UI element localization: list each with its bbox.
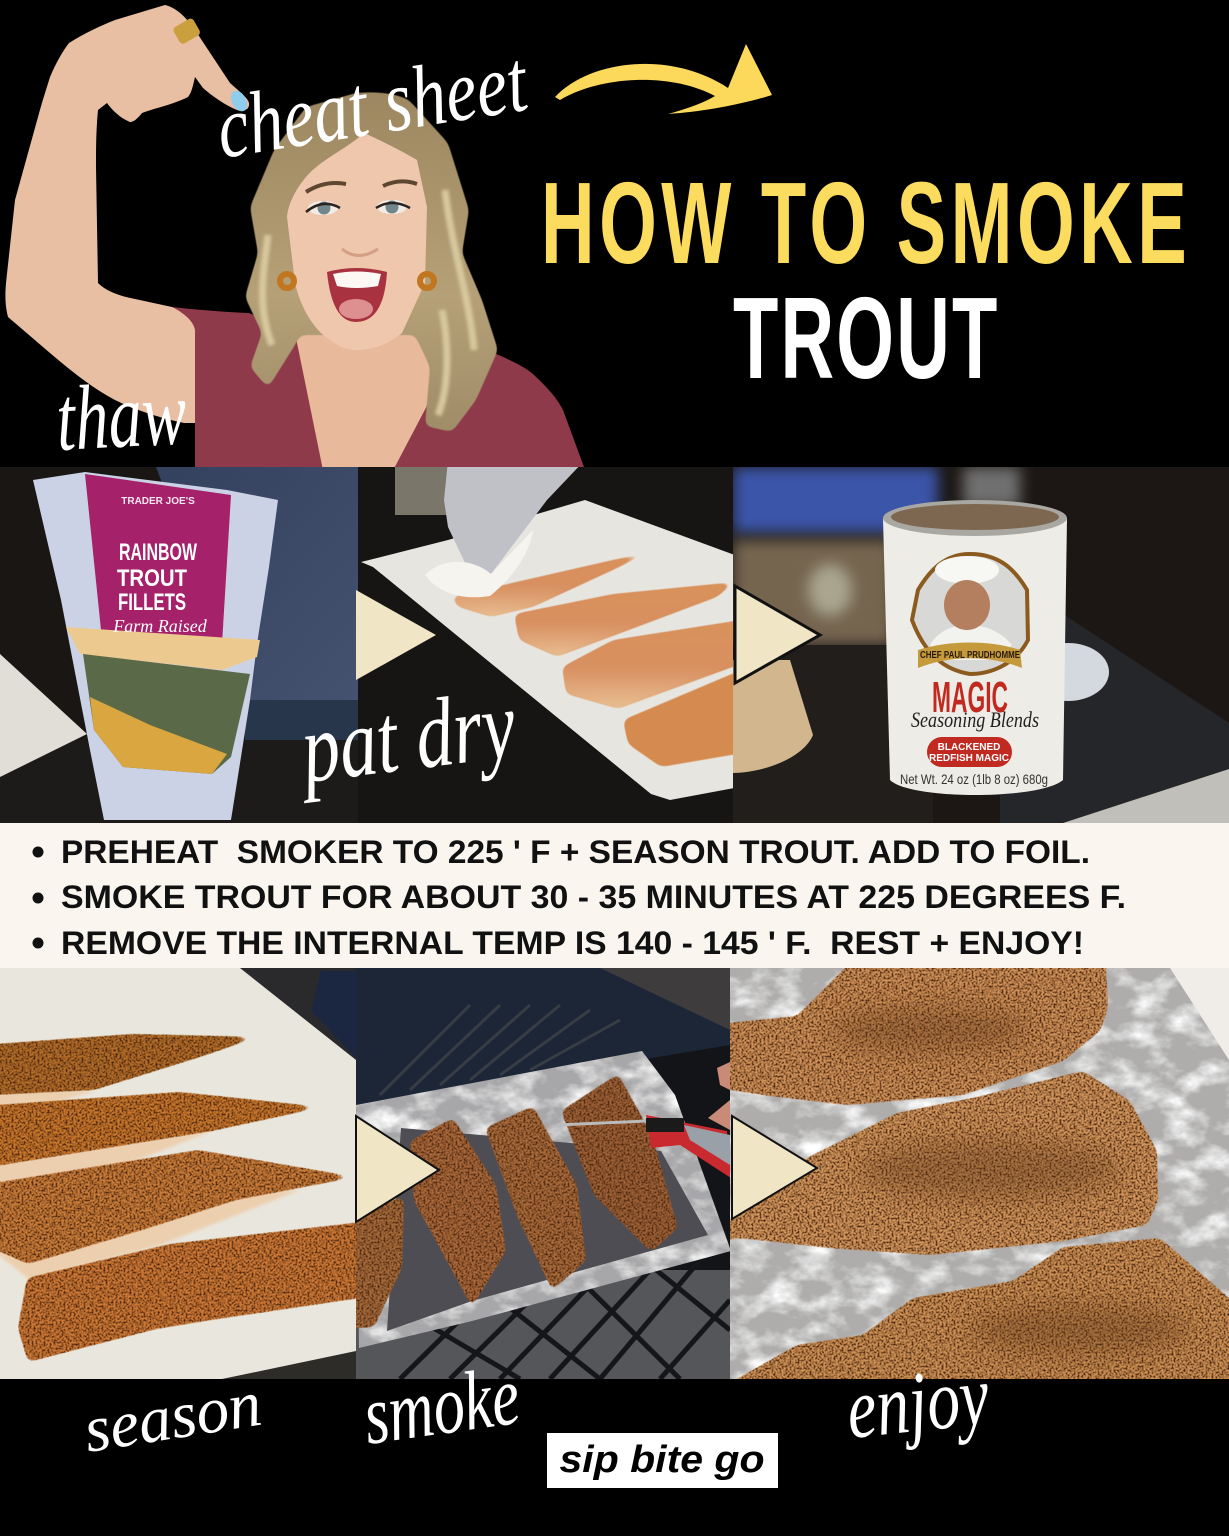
bullet 1: PREHEAT SMOKER TO 225 ' F + SEASON TROUT. ADD TO FOIL. (61, 834, 1090, 870)
panel: thaw photo (0, 467, 358, 824)
mouth (327, 268, 387, 322)
panel: instructions band (0, 823, 1229, 969)
smoker grate, lower (356, 1260, 730, 1379)
trout package: TRADER JOE'S (121, 496, 195, 507)
arrow: thaw to pat dry (356, 590, 436, 680)
seasoned fillets (0, 1034, 380, 1362)
fillet rims (0, 1090, 300, 1280)
panel: seasoning can photo (733, 467, 1229, 824)
label: enjoy: enjoy (842, 1347, 994, 1457)
logo: sip bite go (547, 1433, 778, 1488)
title: TROUT (733, 273, 997, 403)
trout package: FILLETS (118, 589, 186, 616)
eyes (306, 200, 410, 215)
arrow: pat dry to season (735, 586, 820, 683)
smoker grate, upper (380, 1005, 620, 1095)
cooked fillets (700, 950, 1229, 1400)
hand (708, 1062, 730, 1130)
shirt (172, 307, 584, 480)
eyebrows (306, 181, 417, 192)
label: smoke: smoke (358, 1349, 525, 1463)
grey board (1060, 769, 1229, 824)
logo: sip bite go: sip bite go (560, 1439, 764, 1481)
earrings (280, 274, 434, 288)
ring (174, 18, 200, 44)
smoked fillets (330, 1074, 678, 1330)
gloved hand (444, 467, 578, 574)
panel: season photo (0, 968, 380, 1379)
bullet 3: REMOVE THE INTERNAL TEMP IS 140 - 145 ' F. REST + ENJOY! (61, 925, 1084, 961)
label: pat dry: pat dry (291, 671, 521, 804)
bullet 2: SMOKE TROUT FOR ABOUT 30 - 35 MINUTES AT 225 DEGREES F. (61, 879, 1126, 915)
arrow: season to smoke (356, 1116, 439, 1222)
title: HOW TO SMOKE (541, 158, 1187, 288)
fillets (454, 556, 733, 766)
label: thaw: thaw (54, 361, 189, 470)
icon: yellow curved arrow (555, 44, 772, 114)
trout package: TROUT (117, 565, 187, 592)
trout package (33, 472, 278, 820)
lid (1064, 643, 1109, 701)
person in background (156, 467, 358, 700)
panel: enjoy photo (730, 968, 1229, 1379)
nose (342, 249, 378, 256)
paper towel tray (361, 500, 740, 800)
magic seasoning can: REDFISH MAGIC (929, 753, 1009, 764)
chest (296, 334, 430, 467)
magic seasoning can: BLACKENED (938, 742, 1000, 753)
towel on counter (0, 654, 87, 777)
chef badge (912, 554, 1028, 674)
foil tray (356, 1051, 731, 1348)
wood board (733, 660, 813, 773)
chef badge: CHEF PAUL PRUDHOMME (920, 650, 1020, 661)
thermometer (557, 1115, 731, 1178)
title (541, 158, 1187, 403)
trout package: Farm Raised (112, 616, 208, 636)
face (287, 133, 427, 350)
arm and hand (5, 5, 249, 423)
paper towel in hand (425, 530, 533, 597)
arrow: smoke to enjoy (732, 1116, 817, 1219)
panel: smoke photo (330, 968, 731, 1379)
photo: woman pointing (5, 5, 584, 480)
hair highlights (262, 190, 474, 415)
label: season: season (79, 1367, 266, 1467)
magic seasoning can: Net Wt. 24 oz (1lb 8 oz) 680g (900, 771, 1048, 787)
magic seasoning can (883, 500, 1067, 795)
magic seasoning can: Seasoning Blends (911, 707, 1039, 732)
nail (231, 90, 247, 112)
trout package: RAINBOW (119, 539, 197, 566)
label: cheat sheet: cheat sheet (210, 33, 535, 178)
panel: pat dry photo (358, 460, 760, 824)
dark seasoning clusters (830, 1008, 1190, 1355)
magic seasoning can: MAGIC (932, 673, 1008, 722)
hair (245, 92, 498, 432)
